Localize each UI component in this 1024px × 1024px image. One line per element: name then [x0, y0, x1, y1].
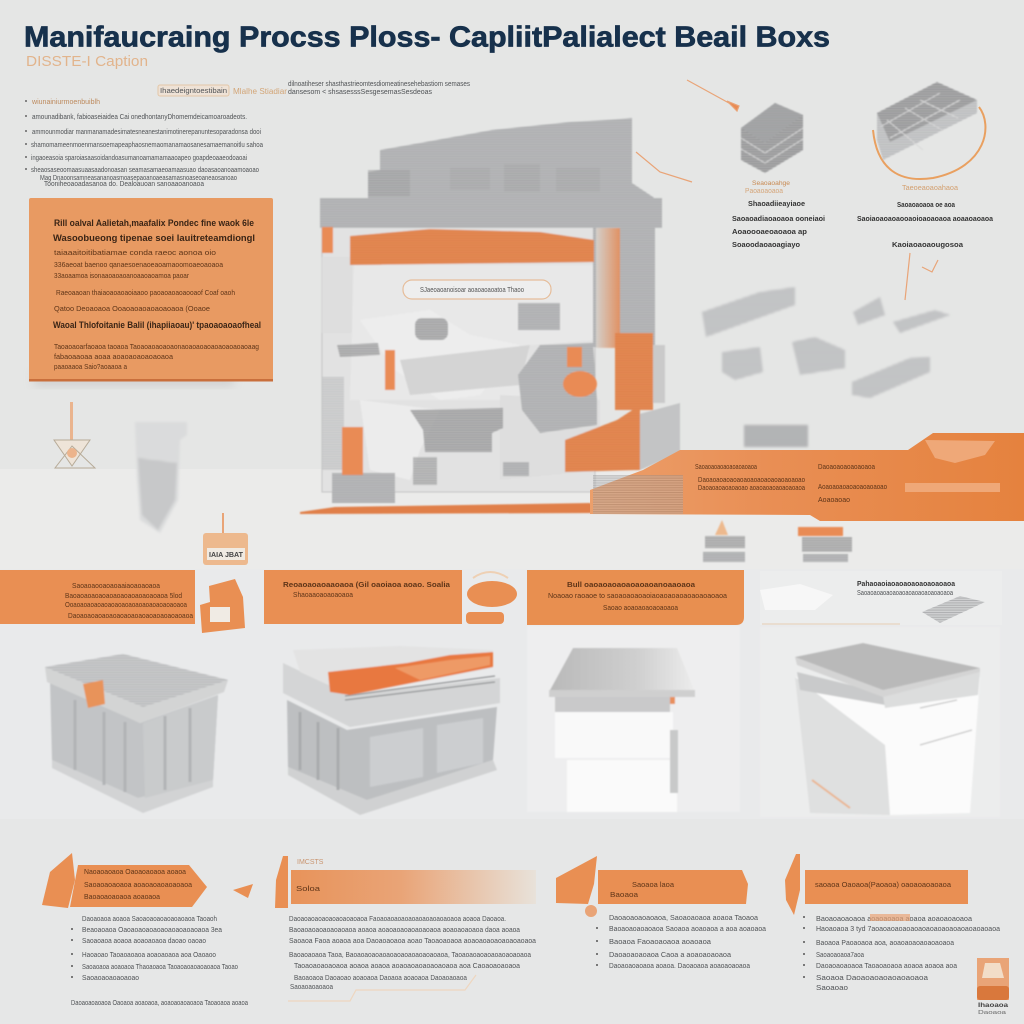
- orange band: Daoaoaoaoaoaoaoa: [818, 462, 876, 471]
- orange header band: [322, 227, 594, 265]
- text block: stacked trays caption: Saoaoadiaoaoaoa ooneiaoi: [732, 214, 825, 223]
- step 1: arrow banner and list: Daoaoaoa aoaoa Saoaoaoaoaoaoaoaoa Taoaoh: [82, 916, 217, 923]
- step 3: banner and list: Daoaoaoaoaoaoa, Saoaoaoaoa aoaoa Taoaoa: [609, 915, 758, 922]
- bullet list: ingaoeasoia sparoiasaasoidandoasumanoamamamaaoapeo goapdeoaaeodoaoai: [31, 155, 247, 162]
- central machine illustration: [300, 118, 680, 514]
- panel: step 4 banner: Pahaoaoiaoaoaoaoaoaoaoaoa: [857, 579, 956, 588]
- panel: orange info box: Rill oalval Aalietah,maafalix Pondec fine waok 6le: [54, 218, 254, 229]
- subtitle: DISSTE-I Caption: [26, 53, 148, 70]
- icon: small crate right: [798, 527, 852, 562]
- icon: corner badge: Daoaoa: [978, 1010, 1007, 1016]
- top centre caption: Mlalhe Stiadiar: [233, 87, 287, 96]
- orange band: Daoaoaoaoaoaoao aoaoaoaoaoaoaoaoa: [698, 483, 806, 492]
- step 4: banner and list: Haoaoaoa 3 tyd 7aoaoaoaoaoaoaoaoaoaoaoaoaoaoaoaoa: [816, 926, 1000, 933]
- step 4: banner and list: saoaoa Oaoaoa(Paoaoa) oaoaoaoaoaoa: [815, 880, 952, 889]
- step 1: arrow banner and list: Beaoaoaoa Oaoaoaoaoaoaoaoaoaoaoaoa 3ea: [82, 927, 222, 934]
- panel: step 1 banner: Ooaoaoaoaoaoaoaoaoaoaoaoaoaoaoaoaoa: [65, 600, 188, 609]
- panel: orange info box: taiaaaitoitibatiamae conda raeoc aonoa oio: [54, 248, 216, 257]
- step 3: banner and list: [556, 856, 766, 970]
- title: Manifaucraing Procss Ploss- CapliitPalialect Beail Boxs: [24, 22, 830, 54]
- panel: orange info box: 336aeoat baenoo qanaesoenaoeaoamaoomoaeoaoaoa: [54, 260, 224, 269]
- orange band: [590, 433, 1024, 521]
- arrows: orange connectors: [636, 80, 985, 300]
- panel: step 3 banner: Saoao aoaoaoaoaoaoaoa: [603, 603, 679, 612]
- panel: step 1 banner: Daoaoaoaoaoaoaoaoaoaoaoaoaoaoaoaoa: [68, 611, 194, 620]
- hatched parts: [332, 303, 597, 503]
- step 2: gradient banner and list: IMCSTS: [297, 859, 324, 866]
- step 3: banner and list: Baoaoa: [610, 890, 639, 899]
- step 4: banner and list: Saoaoao: [816, 985, 848, 992]
- box 2: grey crate with orange lid: [283, 646, 500, 815]
- bullet list: wiunainiurmoenbuiblh: [31, 99, 100, 106]
- top centre caption: Ihaedeigntoestibain: [160, 88, 227, 95]
- pill label: SJaeoaoanoisoar aoaoaoaoatoa Thaoo: [420, 285, 524, 294]
- panel: orange info box: Qatoo Deoaoaoa Ooaoaoaoaoaoaoaoa (Ooaoe: [54, 304, 210, 313]
- step 4: banner and list: Baoaoa Paoaoaoa aoa, aoaoaoaoaoaoaoaoa: [816, 940, 954, 947]
- icon: small crate left: [703, 520, 745, 562]
- icon: tag: IAIA JBAT: [209, 552, 244, 559]
- step 3: banner and list: Baoaoa Faoaoaoaoa aoaoaoa: [609, 939, 711, 946]
- step 4: banner and list: Daoaoaoaoaoa Taoaoaoaoa aoaoa aoaoa aoa: [816, 963, 957, 970]
- panel: step 3 banner: Noaoao raoaoe to saoaoaoaoaoiaoaoaoaoaoaoaoaoaoa: [548, 591, 728, 600]
- panel: orange info box: Taoaoaoarfaoaoa taoaoa Taoaoaoaoaoaonaoaoaoaoaoaoaoaoaoaag: [54, 342, 259, 351]
- step 1: arrow banner and list: [42, 853, 253, 1007]
- step 2: gradient banner and list: Baoaoaoaoa Taoa, Baoaoaoaoaoaoaoaoaoaoaoaoaoa, Taoaoaoaoaoaoaoaoaoaoa: [289, 952, 531, 959]
- text block: stacked trays caption: [732, 180, 825, 249]
- step 1: arrow banner and list: Baoaoaoaoaoa aoaoaoa: [84, 892, 161, 901]
- step 1: arrow banner and list: Saoaoaoa aoaoaoa Thaoaoaoa Taoaoaoaoaoaoaoa Taoao: [82, 964, 238, 971]
- small hatched parts: [702, 287, 950, 447]
- panel: step 2 banner: Reoaoaoaoaaoaoa (Gil oaoiaoa aoao. Soalia: [283, 580, 451, 589]
- bullet list: sheaosaseoomaasuaasaadonoasan seamasamaeoamaasuao daoasaoanoaamoaoao: [31, 167, 259, 174]
- text block: stacked trays caption: Seaoaoahge: [752, 180, 790, 187]
- panel: step 1 banner: Saoaoaooaoaoaaiaoaoaoaoa: [72, 581, 161, 590]
- machine body: [320, 198, 662, 492]
- panel: orange info box: Wasoobueong tipenae soei lauitreteamdiongl: [53, 233, 255, 244]
- step 3: banner and list: Saoaoa laoa: [632, 880, 675, 889]
- orange band: Aoaoaoaoaoaoaoaoaoao: [818, 482, 887, 491]
- bullet list: amounadibank, fabioaseiaidea Cai onedhontanyDhomemdeicamoaroadeots.: [32, 114, 247, 121]
- orange band: Daoaoaoaoaoaoaoaoaoaoaoaoaoaoao: [698, 475, 805, 484]
- orange base bar: [300, 503, 600, 514]
- orange band: Aoaoaoao: [818, 495, 850, 504]
- icon: stacked trays: [741, 103, 803, 173]
- orange parts: [342, 333, 680, 475]
- text block: stacked trays caption: Paoaoaoaoa: [745, 188, 783, 195]
- panel: orange info box: 33aoaamoa isonaaoaoaoanoaaoaoamoa paoar: [54, 271, 189, 280]
- step 2: gradient banner and list: Soloa: [296, 884, 321, 893]
- step 1: arrow banner and list: Naoaoaoaoa Oaoaoaoaoa aoaoa: [84, 867, 187, 876]
- step 1: arrow banner and list: Saoaoaoaoaoaoao: [82, 975, 139, 982]
- step 3: banner and list: Baoaoaoaoaoaoa Saoaoa aoaoaoa a aoa aoaoaoa: [609, 926, 766, 933]
- step 4: banner and list: Baoaoaoaoaoa aoaoaoaoa aoaoa aoaoaoaoaoa: [816, 916, 972, 923]
- panel: orange info box: Waoal Thlofoitanie Balil (ihapiiaoau)' tpaoaoaoaofheal: [53, 320, 261, 331]
- panel: step 2 banner: [264, 570, 517, 624]
- text block: grid tray caption: [857, 185, 994, 249]
- top centre caption: dansesom < shsasesssSesgesemasSesdeoas: [288, 89, 432, 96]
- text block: grid tray caption: Saoaoaoaoa oe aoa: [897, 200, 956, 209]
- box 3: white bin: [527, 626, 740, 812]
- step 2: gradient banner and list: Saoaoaoaoaoa: [290, 984, 333, 991]
- step 2: gradient banner and list: Daoaoaoaoaoaoaoaoaoaoa Faoaoaoaoaoaoaoaoaoaoaoaoa aoaoa Daoaoa.: [289, 916, 506, 923]
- step 1: arrow banner and list: Saoaoaoaoaoa aoaoaoaoaoaoaoa: [84, 880, 193, 889]
- top centre caption: [158, 81, 470, 96]
- step 4: banner and list: [785, 854, 1000, 992]
- box 1: grey crate with orange clip: [45, 654, 228, 813]
- text block: grid tray caption: Taeoeaoaoahaoa: [902, 185, 958, 192]
- panel: step 2 banner: Shaoaaoaoaoaoaoa: [293, 590, 354, 599]
- step 1: arrow banner and list: Daoaoaoaoaoa Oaoaoa aoaoaoa, aoaoaoaoaoaoa Taoaoaoa aoaoa: [71, 1000, 248, 1007]
- icon: tag: [203, 513, 248, 565]
- icon: corner badge: [977, 958, 1009, 1016]
- panel: step 4 banner: Saoaoaoaoaoaoaoaoaoaoaoaoaoaoa: [857, 590, 953, 597]
- step 2: gradient banner and list: Baoaoaoaoaoaoaoaoa aoaoa aoaoaoaoaoaoaoaoa aoaoaoaoaoa daoa aoaoa: [289, 927, 520, 934]
- panel: orange info box: Raeoaaoan thaiaoaoaoaoiaaoo paoaoaoaoaooaof Coaf oaoh: [56, 288, 235, 297]
- bullet list: shamomameenmoenmansoemapeaphaosnemaomanamaosanesamaemanoitlu sahoa: [31, 142, 263, 149]
- top centre caption: dilnoatiheser shasthastrieomtesdiomeatinesehebastiom semases: [288, 81, 470, 88]
- box 4: white tub: [760, 627, 1000, 817]
- panel: orange info box: fabaoaaoaa aoaa aoaoaoaoaoaoaoa: [54, 352, 174, 361]
- step 2: gradient banner and list: Baoaoaoa Daoaoao aoaoaoa Daoaoa aoaoaoa Daoaoaoaoa: [294, 975, 467, 982]
- step 4: banner and list: Saoaoaoaoa7aoa: [816, 952, 864, 959]
- step 2: gradient banner and list: Taoaoaoaoaoaoa aoaoa aoaoa aoaoaoaoaoaoaoaoa aoa Caoaoaoaoaoa: [294, 963, 520, 970]
- text block: grid tray caption: Kaoiaoaoaougosoa: [892, 240, 964, 249]
- text block: stacked trays caption: Aoaoooaeoaoaoa ap: [732, 227, 807, 236]
- step 2: gradient banner and list: [275, 856, 536, 1001]
- step 3: banner and list: Daoaoaoaoaoa Caoa a aoaoaoaoaoa: [609, 952, 731, 959]
- stacked boxes on top: [368, 118, 662, 205]
- panel: step 1 banner: [0, 570, 245, 633]
- bullet list: ammounmodiar manmanamadesimatesneanestanimotinerepanuntesoparadonsa dooi: [32, 129, 261, 136]
- bullet list: Mag Dnaoonsamneasananoasmoasepaoanoaeasamasnoaseoaneaosanoao: [40, 175, 237, 182]
- panel: step 3 banner: Bull oaoaoaoaoaoaoaoanoaaoaoa: [567, 580, 696, 589]
- icon: corner badge: Ihaoaoa: [978, 1002, 1008, 1009]
- icon: hatched bottle: [135, 422, 187, 533]
- panel: step 1 banner: Baoaoaoaoaoaoaoaoaoaoaoaoaoa 5lod: [65, 591, 182, 600]
- step 1: arrow banner and list: Saoaoaoa aoaoa aoaoaoaoa daoao oaoao: [82, 938, 206, 945]
- bullet list: [25, 99, 263, 188]
- panel: step 3 banner: [527, 570, 744, 625]
- pill label: [403, 280, 551, 299]
- text block: stacked trays caption: Shaoadiieayiaoe: [748, 199, 805, 208]
- text block: grid tray caption: Saoiaoaoaoaooaoioaoaoaoa aoaaoaoaoa: [857, 214, 994, 223]
- panel: step 4 banner: [760, 571, 1002, 625]
- icon: grid tray: [877, 82, 977, 160]
- step 2: gradient banner and list: Saoaoa Faoa aoaoa aoa Daoaoaoaoa aoao Taoaoaoaoa aoaoaoaoaoaoaoaoaoa: [289, 938, 536, 945]
- text block: stacked trays caption: Soaoodaoaoagiayo: [732, 240, 800, 249]
- step 1: arrow banner and list: Haoaoao Taoaoaoaoa aoaoaoaoa aoa Oaoaoo: [82, 952, 216, 959]
- panel: orange info box: [29, 198, 273, 386]
- icon: funnel: [54, 402, 95, 468]
- step 4: banner and list: Saoaoa Daoaoaoaoaoaoaoaoa: [816, 975, 928, 982]
- step 3: banner and list: Daoaoaoaoaoa aoaoa. Daoaoaoa aoaoaoaoaoa: [609, 963, 750, 970]
- panel: orange info box: paaoaaoa Saio?aoaaoa a: [54, 362, 128, 371]
- bullet list: Tooniheoaoadasanoa do. Dealoauoan sanoaaoanoaoa: [44, 181, 204, 188]
- orange band: Saoaoaoaoaoaoaoaoaoa: [695, 462, 758, 471]
